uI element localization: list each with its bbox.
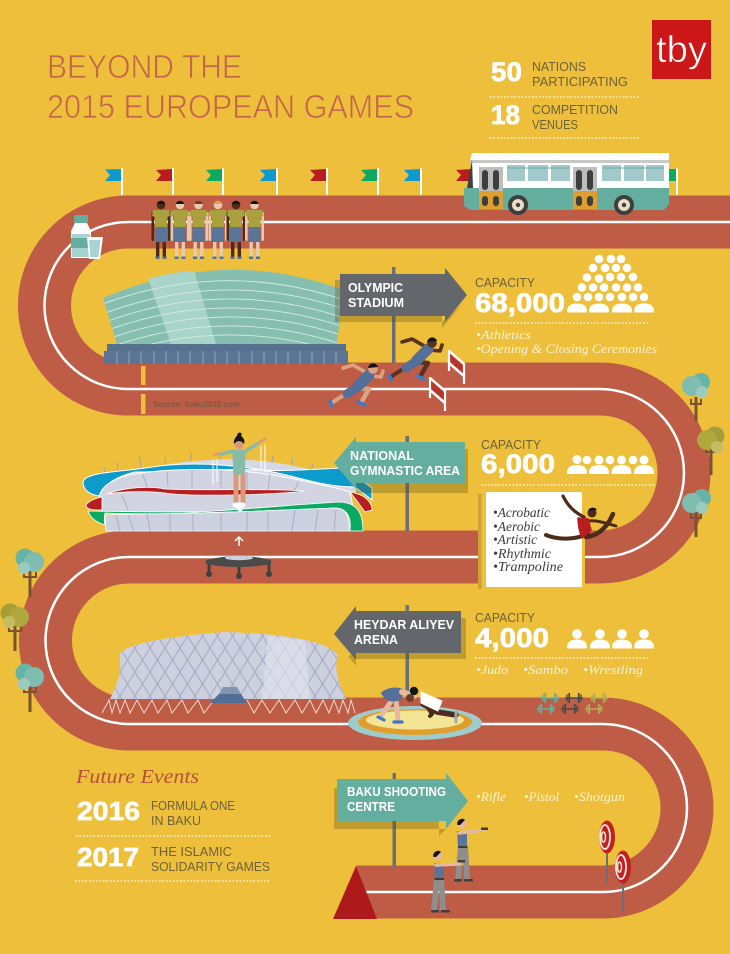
icon: crowd of 4,000 [567,629,654,648]
future events: 2016 [77,796,140,826]
flags [105,168,677,195]
sign: baku shooting centre [334,773,468,867]
icon: up arrow [235,537,243,546]
sign: olympic stadium [335,267,467,363]
capacity: olympic stadium: 68,000 [475,288,565,318]
future events: 2017 [77,842,139,872]
capacity: heydar aliyev arena [475,610,654,677]
stat: nations and venues: COMPETITION [532,102,618,117]
stat: nations and venues: NATIONS [532,59,586,74]
stat: nations and venues: 50 [491,57,522,87]
shooter [454,819,488,882]
shooting disciplines: •Shotgun [574,789,625,804]
sign: baku shooting centre: CENTRE [347,800,395,814]
hurdles [430,350,464,411]
stat: nations and venues: PARTICIPATING [532,74,628,89]
sign: olympic stadium: STADIUM [348,296,404,310]
shooting disciplines: •Rifle [476,789,506,804]
sign: olympic stadium: OLYMPIC [348,281,403,295]
stat: nations and venues: VENUES [532,117,578,132]
icon: crowd of 68,000 [567,255,654,312]
panel: gymnastics disciplines: •Aerobic [493,519,540,534]
capacity: olympic stadium: •Opening & Closing Ceremonies [476,341,657,356]
tree [16,664,44,712]
leaping gymnast [546,496,616,539]
sign: heydar aliyev arena: HEYDAR ALIYEV [354,618,455,632]
panel: gymnastics disciplines: •Rhythmic [493,546,551,561]
future events [75,766,272,881]
future events: IN BAKU [151,813,201,828]
sign: national gymnastic arena: NATIONAL [350,449,414,463]
icon: dumbbells [537,693,608,714]
running track [45,222,730,892]
panel: gymnastics disciplines: •Trampoline [493,559,563,574]
sign: heydar aliyev arena: ARENA [354,633,398,647]
title: 2015 EUROPEAN GAMES [47,89,414,126]
start line markers [141,366,146,414]
tree [682,489,711,537]
icon: crowd of 6,000 [567,455,654,474]
capacity: olympic stadium [475,255,657,356]
capacity: gymnastic arena [481,437,655,485]
capacity: heydar aliyev arena: 4,000 [475,623,549,653]
capacity: heydar aliyev arena: •Wrestling [583,662,644,677]
future events: SOLIDARITY GAMES [151,859,270,874]
future events: FORMULA ONE [151,798,235,813]
shooter [431,851,465,912]
sign: national gymnastic arena [334,436,468,531]
sign: heydar aliyev arena [334,605,466,700]
heydar aliyev arena building [102,632,355,713]
capacity: gymnastic arena: 6,000 [481,449,555,479]
target [615,850,631,912]
panel: gymnastics disciplines: •Artistic [493,532,537,547]
start triangle [333,866,377,919]
tree [0,604,29,651]
logo: tby: tby [656,29,708,70]
stat: nations and venues: 18 [491,100,520,130]
panel: gymnastics disciplines [478,490,585,589]
panel: gymnastics disciplines: •Acrobatic [493,505,550,520]
sign: baku shooting centre: BAKU SHOOTING [347,785,446,799]
capacity: heydar aliyev arena: CAPACITY [475,610,535,625]
wrestling mat [348,706,482,740]
title: BEYOND THE [47,49,242,86]
trampoline gymnast [213,433,265,509]
future events: THE ISLAMIC [151,844,232,859]
sign: national gymnastic arena: GYMNASTIC AREA [350,464,460,478]
tree [16,548,44,597]
capacity: heydar aliyev arena: •Sambo [523,662,569,677]
source note: Source: baku2015.com [153,399,240,409]
capacity: heydar aliyev arena: •Judo [476,662,509,677]
icon: water bottle and glass [71,215,103,259]
target [599,820,615,883]
tree [682,373,710,421]
wrestlers [378,687,456,722]
logo: tby [652,20,711,79]
olympic stadium [100,270,350,364]
athletes line-up [152,201,264,259]
shooting disciplines: •Pistol [524,789,559,804]
tree [697,426,724,475]
bus [464,153,669,215]
trampoline [206,556,272,579]
capacity: olympic stadium: CAPACITY [475,275,535,290]
stat: nations and venues [490,57,639,138]
capacity: gymnastic arena: CAPACITY [481,437,541,452]
shooting disciplines [476,789,625,804]
national gymnastic arena building [83,453,372,531]
runners [330,337,442,406]
capacity: olympic stadium: •Athletics [476,327,531,342]
title [47,49,414,126]
future events: Future Events [75,766,199,788]
